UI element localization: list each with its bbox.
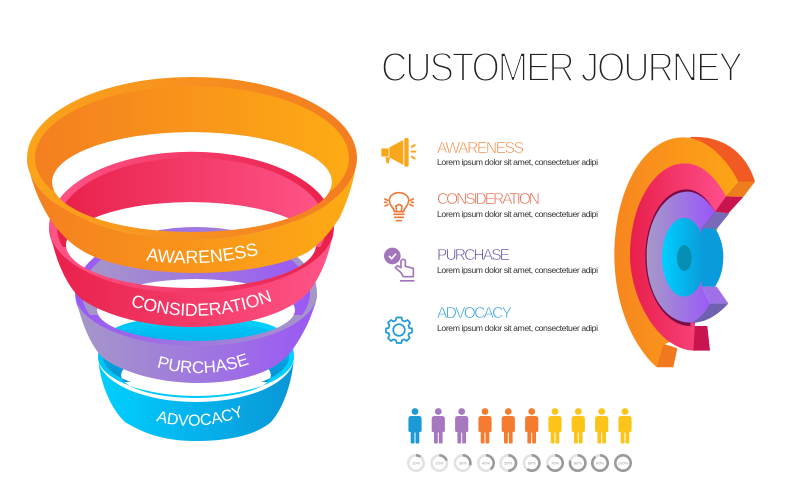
person 8 — [572, 408, 585, 444]
donut 60% — [524, 455, 539, 471]
icon: megaphone — [381, 138, 416, 167]
icon: hand with check badge — [384, 248, 414, 282]
donut 50%: 50% — [504, 460, 513, 466]
blue hub side — [702, 228, 723, 287]
donut 30% — [455, 455, 470, 471]
legend row: consideration — [385, 191, 598, 221]
heading: awareness: AWARENESS — [437, 140, 524, 157]
person 6 — [525, 408, 538, 444]
donut 40%: 40% — [482, 460, 490, 466]
donut 10%: 10% — [412, 460, 420, 466]
blue hub face — [662, 218, 706, 297]
person 5 — [502, 408, 515, 444]
pink ring — [630, 163, 726, 351]
icon: gear — [386, 318, 412, 343]
person 10 — [618, 408, 632, 444]
funnel ring: awareness — [27, 77, 357, 273]
legend row: advocacy — [386, 305, 598, 343]
legend row: purchase — [384, 247, 598, 282]
label: purchase: PURCHASE — [158, 353, 249, 374]
description: awareness: Lorem ipsum dolor sit amet, consectetuer adipi — [437, 157, 598, 167]
title: CUSTOMER JOURNEY — [381, 45, 743, 90]
label: consideration: CONSIDERATION — [132, 290, 272, 316]
person 2 — [432, 408, 445, 444]
description: consideration: Lorem ipsum dolor sit amet, consectetuer adipi — [437, 209, 598, 219]
donut 80%: 80% — [574, 460, 582, 466]
person 3 — [455, 408, 468, 444]
donut 80% — [570, 455, 585, 471]
description: advocacy: Lorem ipsum dolor sit amet, consectetuer adipi — [437, 323, 598, 333]
dark inner shadow — [645, 189, 715, 326]
hub center — [677, 245, 692, 271]
donut 20%: 20% — [435, 460, 444, 466]
donut 60%: 60% — [528, 460, 536, 466]
person 7 — [548, 408, 562, 444]
purple ring sides — [702, 212, 729, 229]
donut 100% — [615, 455, 631, 471]
orange ring side — [690, 137, 755, 182]
icon: light bulb — [385, 193, 413, 221]
funnel ring: purchase — [75, 227, 317, 383]
person 9 — [595, 408, 608, 444]
donut 20% — [432, 455, 447, 471]
donut 50% — [501, 455, 516, 471]
donut 70% — [547, 455, 563, 471]
funnel ring: consideration — [49, 152, 334, 327]
funnel — [27, 77, 357, 441]
pink ring side — [715, 196, 743, 213]
orange ring — [614, 137, 738, 367]
person 4 — [478, 408, 492, 444]
legend list — [381, 138, 598, 343]
donut 40% — [478, 455, 494, 471]
people pictogram row — [408, 408, 632, 444]
donut 70%: 70% — [551, 460, 559, 466]
percentage donut row — [408, 455, 631, 471]
donut 90% — [592, 455, 608, 471]
label: advocacy: ADVOCACY — [156, 406, 240, 426]
heading: advocacy: ADVOCACY — [437, 305, 512, 322]
donut 30%: 30% — [459, 460, 467, 466]
purple ring — [647, 192, 715, 323]
heading: consideration: CONSIDERATION — [437, 191, 540, 208]
description: purchase: Lorem ipsum dolor sit amet, consectetuer adipi — [437, 265, 598, 275]
3D concentric target — [614, 137, 755, 367]
donut 90%: 90% — [596, 460, 604, 466]
heading: purchase: PURCHASE — [437, 247, 510, 264]
donut 100%: 100% — [618, 460, 629, 466]
person 1 — [408, 408, 422, 444]
funnel ring: advocacy — [98, 320, 294, 441]
label: awareness: AWARENESS — [146, 243, 258, 264]
legend row: awareness — [381, 138, 598, 167]
donut 10% — [408, 455, 424, 471]
